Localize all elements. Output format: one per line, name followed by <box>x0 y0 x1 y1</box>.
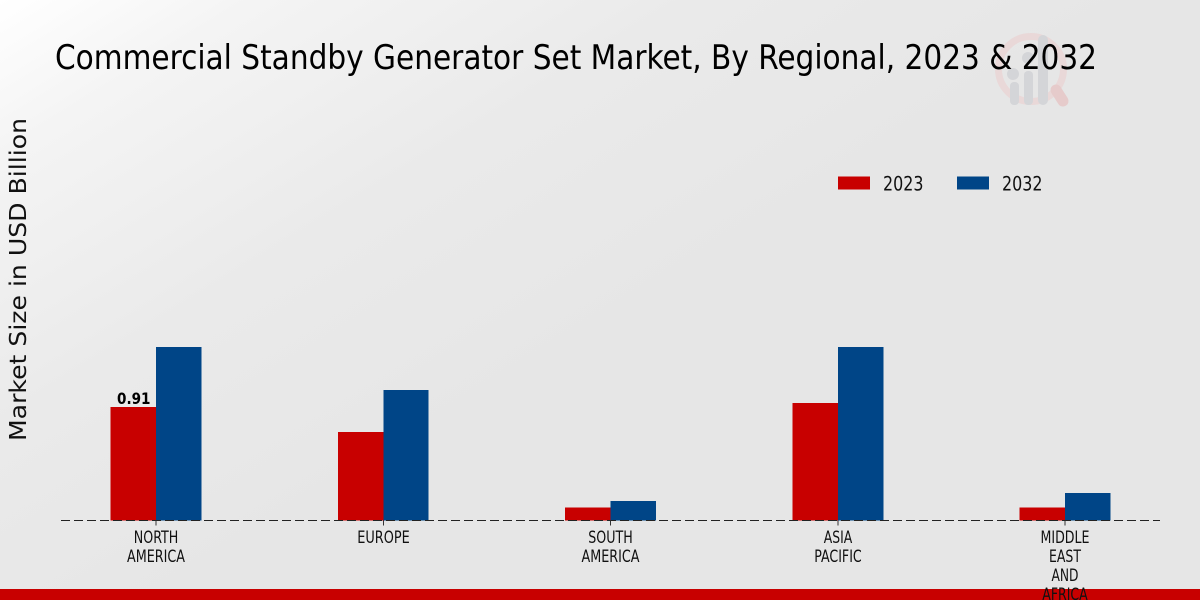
legend item: 2023: 2023 <box>883 172 924 196</box>
bottom bar <box>0 589 1200 600</box>
legend item: 2023 <box>838 172 924 196</box>
label: South America: SOUTH <box>588 528 633 547</box>
label: Middle East and Africa: MIDDLE <box>1040 528 1090 547</box>
legend <box>838 172 1042 196</box>
y axis label: Market Size in USD Billion <box>6 118 32 441</box>
bars: North America <box>110 347 202 520</box>
bars: Middle East and Africa <box>1020 493 1110 520</box>
bar chart <box>61 347 1160 526</box>
label: North America: NORTH <box>134 528 178 547</box>
label: South America: AMERICA <box>582 547 640 566</box>
bars: Asia Pacific <box>792 347 884 520</box>
category labels <box>127 528 1090 600</box>
label: Middle East and Africa: EAST <box>1049 547 1082 566</box>
legend item: 2032 <box>957 172 1042 196</box>
bars: South America <box>565 501 656 520</box>
bars: Europe <box>338 390 428 520</box>
label: Asia Pacific: PACIFIC <box>814 547 862 566</box>
legend item: 2032: 2032 <box>1002 172 1042 196</box>
label: Asia Pacific: ASIA <box>824 528 853 547</box>
title: Commercial Standby Generator Set Market, By Regional, 2023 & 2032 <box>55 38 1097 77</box>
label: Middle East and Africa: AND <box>1052 566 1078 585</box>
icon: magnifier watermark <box>998 35 1064 105</box>
data label: 0.91: 0.91 <box>117 389 150 408</box>
label: North America: AMERICA <box>127 547 186 566</box>
label: Europe: EUROPE <box>357 528 410 547</box>
